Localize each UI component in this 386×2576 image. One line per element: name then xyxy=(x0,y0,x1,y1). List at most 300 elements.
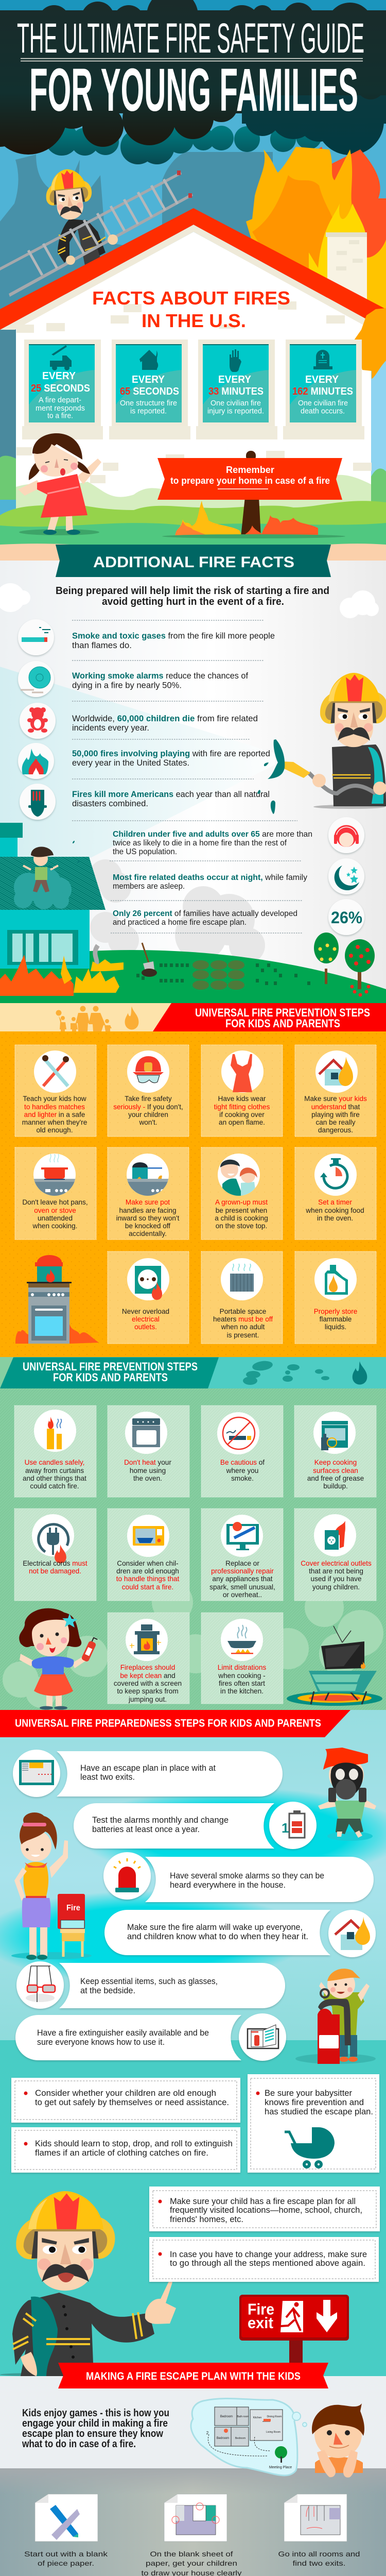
box: babysitter: has studied the escape plan. xyxy=(265,2107,373,2116)
icon: exit plan xyxy=(301,2505,340,2535)
fact: 60,000 children die xyxy=(20,703,258,739)
card: fireplaces: Fireplaces should xyxy=(120,1664,175,1671)
window: every 162 minutes xyxy=(283,340,364,439)
icon: fire truck xyxy=(50,345,72,370)
card: fireplaces xyxy=(108,1613,189,1704)
card: pot handles: accidentally. xyxy=(129,1230,167,1238)
fact: only 26 percent xyxy=(113,899,364,935)
card: repair appliances: spark, smell unusual, xyxy=(209,1583,275,1591)
firefighter with ladder xyxy=(0,167,193,297)
card: fireplaces: covered with a screen xyxy=(114,1680,182,1687)
box: change address: In case you have to change your address, make sure xyxy=(170,2249,367,2259)
header: preparedness steps: UNIVERSAL FIRE PREPAREDNESS STEPS FOR KIDS AND PARENTS xyxy=(15,1718,321,1729)
icon: stroller xyxy=(285,2127,335,2168)
card: candles: Use candles safely, xyxy=(25,1459,84,1466)
card: pot handles xyxy=(108,1147,189,1240)
hero background xyxy=(0,0,386,567)
icon: microwave xyxy=(133,1526,164,1546)
icon: battery: 1 xyxy=(282,1820,289,1836)
card: matches: and lighter in a safe xyxy=(24,1111,85,1118)
thought bubble with floor plan: Kitchen xyxy=(253,2416,262,2419)
icon: uncle sam hat xyxy=(28,790,47,817)
card: understand fire: dangerous. xyxy=(318,1126,353,1134)
icon: family xyxy=(56,1006,112,1031)
icon: alarm lamp xyxy=(114,1858,141,1892)
burning house xyxy=(0,823,106,969)
kid with gas mask xyxy=(318,1748,376,1841)
icon: flame xyxy=(22,749,48,774)
icon: burning house xyxy=(139,350,158,370)
thought bubble with floor plan: Living Room xyxy=(266,2431,280,2434)
card: tight clothes: Have kids wear xyxy=(218,1095,266,1103)
window: every 162 minutes: 162 MINUTES xyxy=(292,386,353,397)
card: grown-up present: be present when xyxy=(216,1207,267,1214)
pill: fire extinguisher: sure everyone knows how to use it. xyxy=(37,2037,165,2047)
icon: pan on burner xyxy=(227,1625,256,1654)
card: take fire safety seriously xyxy=(108,1045,189,1137)
window: every 25 seconds: EVERY xyxy=(42,370,76,382)
card: limit distractions: when cooking - xyxy=(218,1672,266,1680)
pill: test alarms xyxy=(74,1802,317,1849)
card: set a timer: in the oven. xyxy=(317,1214,353,1222)
card: space heaters: is present. xyxy=(227,1331,259,1339)
banner: additional fire facts: ADDITIONAL FIRE FACTS xyxy=(93,554,294,571)
card: set a timer: Set a timer xyxy=(318,1198,352,1206)
card: cover outlets: used if you have xyxy=(311,1575,361,1583)
window: every 25 seconds xyxy=(22,340,103,439)
boy thinking xyxy=(312,2403,364,2478)
icon: injured hand xyxy=(230,349,241,372)
card: pot handles: inward so they won't xyxy=(116,1214,180,1222)
fact: 60,000 children die: Worldwide, 60,000 children die from fire related xyxy=(72,714,258,723)
thought bubble with floor plan: Dining Room xyxy=(267,2415,282,2418)
section: plan steps xyxy=(0,2468,386,2576)
boy with extinguisher xyxy=(295,1969,376,2064)
card: fireplaces: jumping out. xyxy=(128,1696,167,1703)
step: draw house xyxy=(141,2494,242,2576)
step: find two exits: find two exits. xyxy=(292,2560,346,2567)
intro text: avoid getting hurt in the event of a fire. xyxy=(102,596,284,607)
pill: test alarms: batteries at least once a year. xyxy=(92,1824,200,1834)
thought bubble with floor plan: Bath room xyxy=(237,2415,249,2418)
sign with flames xyxy=(157,451,345,538)
illustration: stove with pot on fire xyxy=(15,1255,99,1344)
woman with fire sign: Fire xyxy=(66,1904,80,1912)
card: hot pans: unattended xyxy=(38,1214,73,1222)
box: babysitter: knows fire prevention and xyxy=(265,2097,364,2107)
step: find two exits: Go into all rooms and xyxy=(278,2550,360,2558)
card: cover outlets: young children. xyxy=(312,1583,360,1591)
icon: battery xyxy=(282,1810,305,1838)
fact: children under five: Children under five and adults over 65 are more than xyxy=(113,830,312,839)
card: don't heat using oven xyxy=(108,1405,189,1497)
bushes and ground xyxy=(0,455,386,561)
card: limit distractions xyxy=(201,1613,283,1704)
intro text: Being prepared will help limit the risk of starting a fire and xyxy=(56,585,329,597)
sign with flames: Remember xyxy=(226,465,274,475)
card: understand fire: can be really xyxy=(315,1118,356,1126)
heading: facts about fires: IN THE U.S. xyxy=(142,310,246,331)
card: grown-up present xyxy=(201,1147,283,1240)
card: hot pans: oven or stove xyxy=(34,1207,76,1214)
thought bubble with floor plan: 2 xyxy=(206,2431,209,2435)
thought bubble with floor plan: Bedroom xyxy=(235,2437,245,2440)
hill with garden xyxy=(0,933,386,1003)
card: tight clothes: tight fitting clothes xyxy=(214,1103,270,1111)
girl with extinguisher xyxy=(19,1608,98,1709)
banner: making a fire escape plan xyxy=(58,2363,328,2388)
fact: night deaths xyxy=(113,858,364,894)
card: don't heat using oven: the oven. xyxy=(133,1475,162,1482)
icon: manual xyxy=(248,2025,278,2048)
card: child age: could start a fire. xyxy=(122,1583,173,1591)
card: take fire safety seriously: won't. xyxy=(138,1118,157,1126)
icon: smoke alarm xyxy=(21,667,50,692)
card: cautious smoking: Be cautious of xyxy=(220,1459,265,1466)
fact: children under five: twice as likely to die in a home fire than the rest of xyxy=(113,839,287,848)
icon: fire helmet xyxy=(133,1056,164,1083)
fact: night deaths: Most fire related deaths occur at night, while family xyxy=(113,873,307,882)
card: candles: and other things that xyxy=(23,1475,86,1482)
card: matches: Teach your kids how xyxy=(23,1095,86,1103)
pill: fire extinguisher: Have a fire extinguisher easily available and be xyxy=(37,2028,209,2038)
icon: timer xyxy=(320,1158,347,1188)
window: every 65 seconds: 65 SECONDS xyxy=(120,386,179,397)
card: limit distractions: fires often start xyxy=(219,1680,265,1687)
window: every 33 minutes: EVERY xyxy=(218,374,252,385)
woman with fire sign xyxy=(11,1812,92,1960)
card: fireplaces: to keep sparks from xyxy=(117,1687,179,1695)
card: space heaters: Portable space xyxy=(220,1308,266,1315)
icon: down arrow xyxy=(317,2300,337,2332)
header: fire prevention steps teal xyxy=(0,1357,386,1388)
step: blank paper: Start out with a blank xyxy=(24,2550,108,2558)
kids enjoy games text: escape plan to ensure they know xyxy=(22,2428,163,2439)
card: repair appliances: or overheat.. xyxy=(223,1591,262,1599)
card: matches: old enough. xyxy=(36,1126,73,1134)
section: orange prevention xyxy=(0,1031,386,1358)
card: electrical cords: Electrical cords must xyxy=(23,1560,87,1567)
card: flammable liquids: flammable xyxy=(320,1315,352,1323)
fact: smoke and toxic gases: than flames do. xyxy=(72,640,132,650)
box: children old enough xyxy=(11,2078,240,2123)
card: matches: manner when they're xyxy=(22,1118,87,1126)
box: children old enough: Consider whether your children are old enough xyxy=(35,2088,216,2098)
fact: only 26 percent: Only 26 percent of families have actually developed xyxy=(113,909,297,918)
card: set a timer: when cooking food xyxy=(305,1207,364,1214)
box: stop drop roll: flames if an article of clothing catches on fire. xyxy=(35,2148,208,2158)
card: don't heat using oven: Don't heat your xyxy=(124,1459,171,1466)
heading: facts about fires xyxy=(92,287,290,331)
box: escape plan all locations: Make sure your child has a fire escape plan for all xyxy=(170,2196,356,2206)
fact: children under five xyxy=(113,817,364,856)
intro text xyxy=(56,585,329,607)
icon: oil bottle xyxy=(325,1265,348,1295)
fact: smoke and toxic gases: Smoke and toxic gases from the fire kill more people xyxy=(72,631,275,641)
card: flammable liquids: Properly store xyxy=(314,1308,357,1315)
fact: 50,000 fires: 50,000 fires involving playing with fire are reported xyxy=(72,749,270,758)
fact: working smoke alarms: Working smoke alarms reduce the chances of xyxy=(72,671,248,681)
fire exit sign: Fire xyxy=(248,2300,274,2318)
card: flammable liquids: liquids. xyxy=(325,1323,346,1331)
card: grown-up present: A grown-up must xyxy=(215,1198,268,1206)
icon: floor plan xyxy=(19,1760,54,1785)
header: fire prevention steps orange: FOR KIDS AND PARENTS xyxy=(225,1017,340,1030)
card: take fire safety seriously: your children xyxy=(128,1111,168,1118)
fact: night deaths: members are asleep. xyxy=(113,882,185,891)
big fire xyxy=(246,147,386,319)
card: matches xyxy=(15,1045,96,1137)
pill: several smoke alarms xyxy=(103,1852,374,1902)
smoke puffs xyxy=(3,1582,383,1708)
card: clean cooking surfaces: Keep cooking xyxy=(314,1459,357,1466)
pill: escape plan xyxy=(13,1750,283,1797)
card: limit distractions: in the kitchen. xyxy=(220,1687,264,1695)
fact: 60,000 children die: incidents every year. xyxy=(72,723,149,733)
window: every 65 seconds: EVERY xyxy=(132,374,165,385)
window: every 25 seconds: A fire depart- xyxy=(39,396,81,404)
pill: essential items: Keep essential items, such as glasses, xyxy=(80,1976,218,1986)
card: hot pans xyxy=(15,1147,96,1240)
pill: essential items: at the bedside. xyxy=(80,1986,135,1995)
ground flames xyxy=(0,955,124,996)
step: blank paper: of piece paper. xyxy=(38,2560,94,2567)
card: child age xyxy=(108,1509,189,1601)
header: fire prevention steps orange xyxy=(0,1003,386,1031)
icon: pencil and ruler xyxy=(50,2505,80,2540)
window: every 162 minutes: EVERY xyxy=(305,374,339,385)
child on roof xyxy=(23,847,58,892)
section: kids games xyxy=(0,2376,386,2468)
icon: plug xyxy=(39,1524,68,1563)
card: electrical cords: not be damaged. xyxy=(29,1567,81,1575)
card: cover outlets: Cover electrical outlets xyxy=(301,1560,372,1567)
box: stop drop roll xyxy=(11,2127,240,2173)
icon: house on fire xyxy=(319,1057,353,1086)
card: understand fire: understand that xyxy=(311,1103,360,1111)
card: repair appliances: professionally repair xyxy=(211,1567,274,1575)
window: every 33 minutes: injury is reported. xyxy=(207,407,264,415)
window: every 33 minutes: 33 MINUTES xyxy=(208,386,264,397)
icon: flame xyxy=(125,1006,138,1029)
card: cautious smoking xyxy=(201,1405,283,1497)
pill: wake everyone: Make sure the fire alarm will wake up everyone, xyxy=(127,1922,303,1932)
pill: essential items xyxy=(16,1961,285,2009)
thought bubble with floor plan: Meeting Place xyxy=(269,2466,292,2469)
pumpkins xyxy=(192,960,244,990)
icon: heater xyxy=(230,1264,254,1292)
header: fire prevention steps teal: UNIVERSAL FIRE PREVENTION STEPS xyxy=(23,1360,198,1373)
card: space heaters: heaters must be off xyxy=(213,1315,273,1323)
box: change address xyxy=(149,2237,379,2282)
firefighter with hose xyxy=(257,673,386,814)
window: every 162 minutes: death occurs. xyxy=(301,407,345,415)
icon: dress xyxy=(231,1054,252,1092)
section background: additional facts xyxy=(0,561,386,1004)
smoke clouds xyxy=(0,0,386,164)
header: fire prevention steps teal: FOR KIDS AND PARENTS xyxy=(53,1371,168,1384)
card: child age: Consider when chil- xyxy=(117,1560,179,1567)
card: electrical cords xyxy=(14,1509,96,1601)
box: escape plan all locations: friends' homes, etc. xyxy=(170,2214,243,2224)
fact: fires kill more americans: Fires kill more Americans each year than all natural xyxy=(72,789,270,799)
icon: house on fire xyxy=(335,1917,370,1950)
card: electrical outlets: Never overload xyxy=(122,1308,169,1315)
icon: running man xyxy=(280,2301,303,2332)
card: cover outlets: that are not being xyxy=(309,1567,363,1575)
step: find two exits xyxy=(278,2494,360,2567)
card: limit distractions: Limit distrations xyxy=(218,1664,266,1671)
fact: 50,000 fires xyxy=(18,743,270,779)
house roof and wall xyxy=(0,208,386,517)
fire exit sign: exit xyxy=(248,2314,273,2332)
fact: only 26 percent: and practiced a home fire escape plan. xyxy=(113,918,247,927)
icon: no smoking xyxy=(223,1417,255,1449)
icon: crossed matches xyxy=(42,1055,69,1086)
card: grown-up present: on the stove top. xyxy=(216,1222,267,1230)
card: tight clothes: if cooking over xyxy=(219,1111,265,1118)
banner: making a fire escape plan: MAKING A FIRE ESCAPE PLAN WITH THE KIDS xyxy=(86,2370,301,2382)
window: every 65 seconds: is reported. xyxy=(130,407,167,415)
box: escape plan all locations xyxy=(149,2187,380,2231)
apple tree xyxy=(345,939,375,996)
header: preparedness steps xyxy=(0,1710,350,1737)
fact: fires kill more americans: disasters combined. xyxy=(72,799,148,808)
fact: smoke and toxic gases xyxy=(18,619,275,655)
box: escape plan all locations: frequently visited locations—home, school, church, xyxy=(170,2205,362,2215)
card: space heaters: when no adult xyxy=(221,1323,265,1331)
card: fireplaces: be kept clean and xyxy=(120,1672,176,1680)
card: repair appliances xyxy=(201,1509,283,1601)
card: repair appliances: Replace or xyxy=(225,1560,259,1567)
fact: 50,000 fires: every year in the United States. xyxy=(72,758,189,768)
icon: teddy bear xyxy=(27,707,48,733)
step: draw house: paper, get your children xyxy=(146,2560,237,2567)
card: clean cooking surfaces xyxy=(294,1405,376,1497)
pill: several smoke alarms: heard everywhere in the house. xyxy=(170,1880,286,1890)
icon: oven xyxy=(132,1418,160,1447)
fact: only 26 percent: 26% xyxy=(331,908,362,927)
kids enjoy games text: Kids enjoy games - this is how you xyxy=(22,2408,169,2419)
pill: test alarms: Test the alarms monthly and change xyxy=(92,1815,229,1825)
card: take fire safety seriously: Take fire safety xyxy=(125,1095,172,1103)
card: clean cooking surfaces: surfaces clean xyxy=(313,1467,358,1475)
box: change address: to go through all the steps mentioned above again. xyxy=(170,2258,365,2268)
card: clean cooking surfaces: and free of grease xyxy=(307,1475,364,1482)
tv on cabinet with rug xyxy=(287,1626,382,1706)
card: flammable liquids xyxy=(295,1251,376,1344)
card: child age: dren are old enough xyxy=(116,1567,179,1575)
card: candles: away from curtains xyxy=(25,1467,84,1475)
window: every 25 seconds: ment responds xyxy=(36,404,85,413)
kids enjoy games text xyxy=(22,2408,169,2450)
card: understand fire xyxy=(295,1045,376,1137)
card: electrical outlets: electrical xyxy=(132,1315,160,1323)
card: hot pans: when cooking. xyxy=(32,1222,77,1230)
axe xyxy=(142,943,157,977)
step: draw house: On the blank sheet of xyxy=(150,2550,233,2558)
icon: outlet xyxy=(135,1266,162,1300)
window: every 33 minutes: One civilian fire xyxy=(210,399,261,408)
heading: facts about fires: FACTS ABOUT FIRES xyxy=(92,287,290,309)
card: cautious smoking: smoke. xyxy=(231,1475,254,1482)
card: grown-up present: a child is cooking xyxy=(215,1214,268,1222)
icon: monitor with wrench xyxy=(226,1522,259,1550)
card: understand fire: playing with fire xyxy=(311,1111,360,1118)
window: every 33 minutes xyxy=(196,340,277,439)
thought bubble with floor plan: Bedroom xyxy=(217,2437,229,2440)
box: babysitter xyxy=(248,2074,379,2173)
big firefighter pointing xyxy=(0,2191,176,2376)
pill: several smoke alarms: Have several smoke alarms so they can be xyxy=(170,1871,324,1880)
card: candles xyxy=(14,1405,96,1497)
fact: working smoke alarms: dying in a fire by nearly 50%. xyxy=(72,680,182,690)
step: blank paper xyxy=(24,2494,108,2567)
card: electrical outlets xyxy=(108,1251,189,1344)
fire exit sign xyxy=(239,2295,349,2365)
icon: child with headphones xyxy=(334,826,359,847)
window: every 25 seconds: 25 SECONDS xyxy=(31,383,90,394)
card: hot pans: Don't leave hot pans, xyxy=(22,1198,88,1206)
icon: glasses on stand xyxy=(26,1966,55,2002)
icon: gravestone xyxy=(313,350,332,369)
card: pot handles: handles are facing xyxy=(119,1207,177,1214)
window: every 25 seconds: to a fire. xyxy=(47,411,73,420)
icon: fireplace xyxy=(130,1624,161,1654)
card: pot handles: Make sure pot xyxy=(126,1198,170,1206)
pill: escape plan: least two exits. xyxy=(80,1772,135,1782)
thought bubble with floor plan: Bedroom xyxy=(220,2415,233,2418)
fact: fires kill more americans xyxy=(20,784,270,820)
pill: fire extinguisher xyxy=(15,2013,286,2061)
open mouth xyxy=(58,2273,74,2282)
window: every 65 seconds: One structure fire xyxy=(120,399,177,408)
box: stop drop roll: Kids should learn to stop, drop, and roll to extinguish xyxy=(35,2139,233,2148)
pill: escape plan: Have an escape plan in place with at xyxy=(80,1763,216,1773)
card: don't heat using oven: home using xyxy=(130,1467,166,1475)
sign with flames: to prepare your home in case of a fire xyxy=(170,476,330,486)
icon: oven and spray xyxy=(321,1421,348,1450)
icon: covered outlet xyxy=(325,1521,345,1550)
fact: working smoke alarms xyxy=(18,661,248,697)
chimney xyxy=(326,232,367,310)
section: green prevention xyxy=(0,1388,386,1710)
card: matches: to handles matches xyxy=(24,1103,85,1111)
icon: house plan xyxy=(172,2503,219,2535)
box: babysitter: Be sure your babysitter xyxy=(265,2088,352,2098)
section: preparedness background xyxy=(0,1710,386,2376)
card: clean cooking surfaces: buildup. xyxy=(323,1482,348,1490)
icon: footprints xyxy=(243,1360,329,1385)
icon: pot on stove xyxy=(33,1154,76,1196)
kids enjoy games text: engage your child in making a fire xyxy=(22,2418,168,2429)
title xyxy=(17,15,364,124)
card: repair appliances: any appliances that xyxy=(212,1575,273,1583)
card: pot handles: be knocked off xyxy=(125,1222,170,1230)
icon: saucepan on stove xyxy=(127,1162,169,1196)
icon: flame xyxy=(353,1361,367,1385)
card: understand fire: Make sure your kids xyxy=(304,1095,367,1103)
window: every 65 seconds xyxy=(109,340,190,439)
pill: wake everyone xyxy=(104,1910,376,1957)
card: set a timer xyxy=(295,1147,376,1240)
card: take fire safety seriously: seriously - If you don't, xyxy=(113,1103,183,1111)
banner: additional fire facts xyxy=(56,545,331,577)
pill: wake everyone: and children know what to do when they hear it. xyxy=(127,1931,308,1941)
icon: moon and stars xyxy=(335,866,359,890)
pear tree xyxy=(314,933,339,984)
card: child age: to handle things that xyxy=(116,1575,179,1583)
